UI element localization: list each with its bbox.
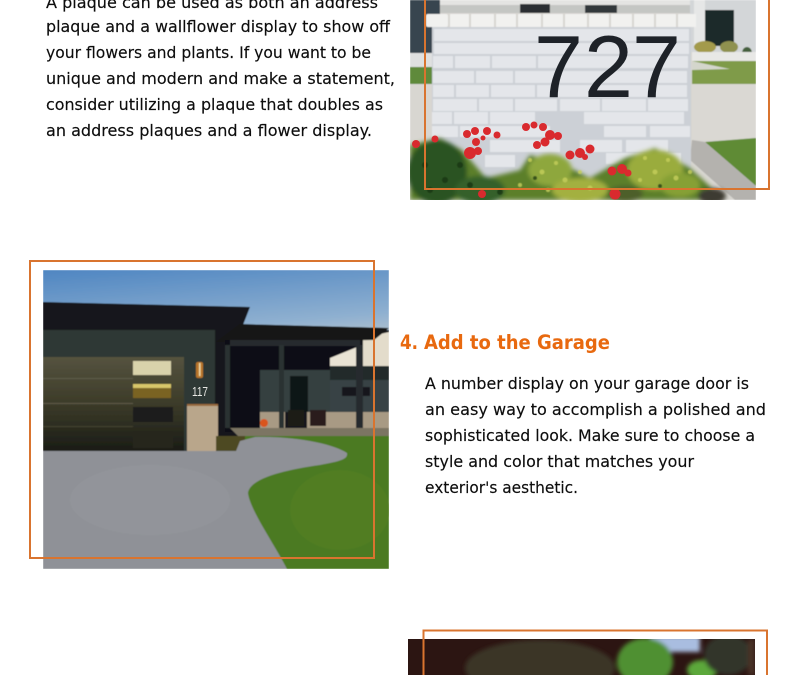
step heading: Add to the Garage: Add to the Garage [424,331,610,354]
porch columns [225,345,230,428]
porch [225,340,360,432]
paragraph: plaque description [46,0,395,140]
photo: white brick address plaque 727 [407,0,756,204]
lawn [230,436,389,569]
paragraph: plaque description: consider utilizing a plaque that doubles as [46,95,383,114]
paragraph: garage description: sophisticated look. Make sure to choose a [425,426,755,445]
brick wall [432,27,691,177]
frame: orange outline, photo 3 [424,630,767,675]
leaf texture [518,156,692,192]
photo: dark house with garage number 117 [43,270,390,569]
paragraph: garage description [425,374,766,497]
house number 727: 727 [534,17,681,116]
foliage [407,138,726,204]
stone pillar [187,405,218,452]
paragraph: plaque description: plaque and a wallflower display to show off [46,17,391,36]
red flowers [412,122,632,200]
wall cap [426,14,696,27]
photo: trees, cropped at page bottom [408,635,755,675]
paragraph: plaque description: your flowers and plants. If you want to be [46,43,371,62]
driveway [43,437,347,569]
lower roof [240,324,389,341]
garage door [43,357,184,451]
paragraph: garage description: exterior's aesthetic. [425,478,578,497]
stairs [230,428,389,438]
paragraph: garage description: A number display on your garage door is [425,374,749,393]
mulch bed [216,436,245,452]
wall lamp [196,362,203,378]
frame: orange outline, photo 2 [30,261,374,558]
paragraph: plaque description: unique and modern and make a statement, [46,69,395,88]
frame: orange outline, photo 1 [425,0,769,189]
paragraph: garage description: style and color that matches your [425,452,694,471]
paragraph: plaque description: an address plaques and a flower display. [46,121,372,140]
house number 117: 117 [192,384,208,399]
step heading: Add to the Garage: 4. [400,331,418,354]
siding wall [43,330,215,452]
lower wall backing [215,330,389,440]
paragraph: garage description: an easy way to accomplish a polished and [425,400,766,419]
upper roof [43,302,250,333]
